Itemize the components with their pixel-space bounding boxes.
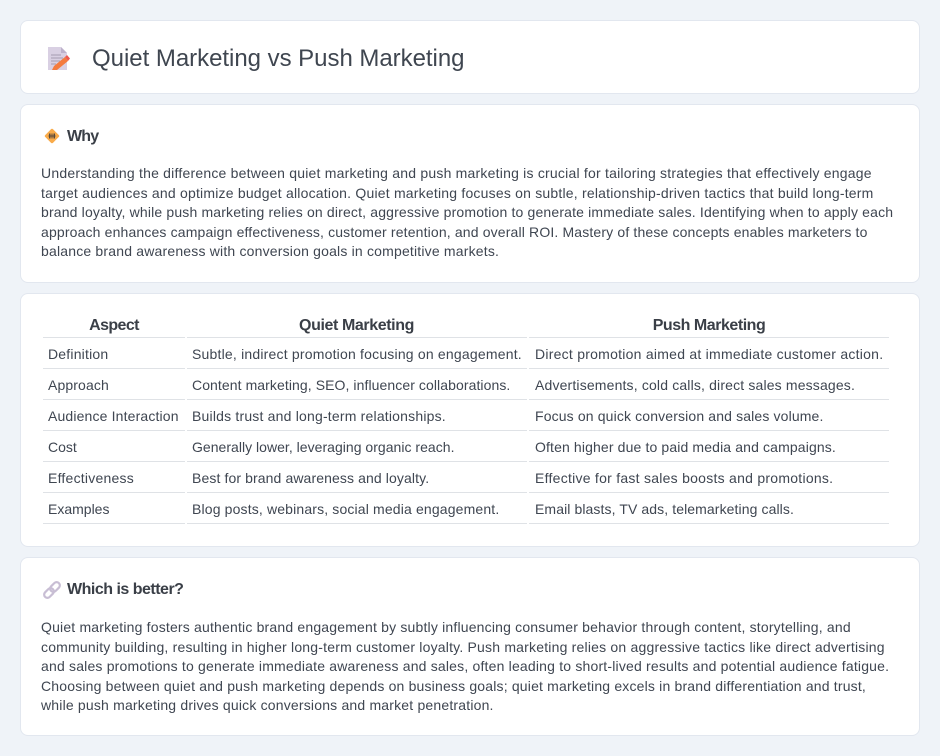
text: which is better paragraph: while push marketing drives quick conversions and market penetration. [41,697,494,713]
header row: Push Marketing [653,317,765,334]
text: which is better paragraph: community building, resulting in higher long-term customer loyalty. Push marketing relies on aggressive tactics like direct advertising [41,639,885,655]
row: audience interaction: Builds trust and long-term relationships. [192,408,446,424]
panel: which is better [20,557,920,736]
header row: Aspect [89,317,139,334]
row: effectiveness: Effectiveness [48,470,134,486]
icon: document with pencil [48,47,70,70]
row: examples: Blog posts, webinars, social media engagement. [192,501,499,517]
row: approach [48,377,855,393]
row: audience interaction [48,408,824,424]
row: audience interaction: Focus on quick conversion and sales volume. [535,408,824,424]
heading: which is better: Which is better? [67,581,183,598]
text: which is better paragraph: Choosing between quiet and push marketing depends on business goals; quiet marketing excels in brand differentiation and trust, [41,678,866,694]
text: why paragraph: brand loyalty, while push marketing relies on direct, aggressive promotion to generate immediate sales. Identifying when to apply each [41,204,893,220]
row: cost: Often higher due to paid media and campaigns. [535,439,836,455]
panel: header [20,20,920,94]
row: examples: Email blasts, TV ads, telemarketing calls. [535,501,794,517]
icon: warning diamond [44,128,60,144]
text: why paragraph: target audiences and optimize budget allocation. Quiet marketing focuses on subtle, relationship-driven tactics that build long-term [41,185,874,201]
row: effectiveness: Best for brand awareness and loyalty. [192,470,429,486]
text: why paragraph: balance brand awareness with conversion goals in competitive markets. [41,243,499,259]
text: why paragraph: Understanding the difference between quiet marketing and push marketing is crucial for tailoring strategies that effectively engage [41,165,872,181]
text: which is better paragraph: and sales promotions to generate immediate awareness and sales, often leading to short-lived results and potential audience fatigue. [41,658,889,674]
row: approach: Content marketing, SEO, influencer collaborations. [192,377,510,393]
row: audience interaction: Audience Interaction [48,408,179,424]
row: approach: Advertisements, cold calls, direct sales messages. [535,377,855,393]
row: approach: Approach [48,377,109,393]
panel: comparison table [20,293,920,547]
row: cost: Cost [48,439,77,455]
row: effectiveness: Effective for fast sales boosts and promotions. [535,470,833,486]
table: comparison [43,317,889,524]
heading: why: Why [67,128,98,145]
row: cost: Generally lower, leveraging organic reach. [192,439,454,455]
icon: chain link [43,581,61,599]
text: which is better paragraph: Quiet marketing fosters authentic brand engagement by subtly influencing consumer behavior through content, storytelling, and [41,619,851,635]
row: definition: Subtle, indirect promotion focusing on engagement. [192,346,522,362]
row: effectiveness [48,470,833,486]
row: definition [48,346,883,362]
text: why paragraph [41,165,893,259]
text: which is better paragraph [41,619,889,713]
title: Quiet Marketing vs Push Marketing [92,45,464,72]
row: definition: Direct promotion aimed at immediate customer action. [535,346,883,362]
row: examples: Examples [48,501,109,517]
header row: Quiet Marketing [299,317,414,334]
panel: why [20,104,920,283]
row: definition: Definition [48,346,108,362]
header row [89,317,765,334]
text: why paragraph: approach enhances campaign effectiveness, customer retention, and overall ROI. Mastery of these concepts enables marketers to [41,224,868,240]
row: cost [48,439,836,455]
row: examples [48,501,794,517]
